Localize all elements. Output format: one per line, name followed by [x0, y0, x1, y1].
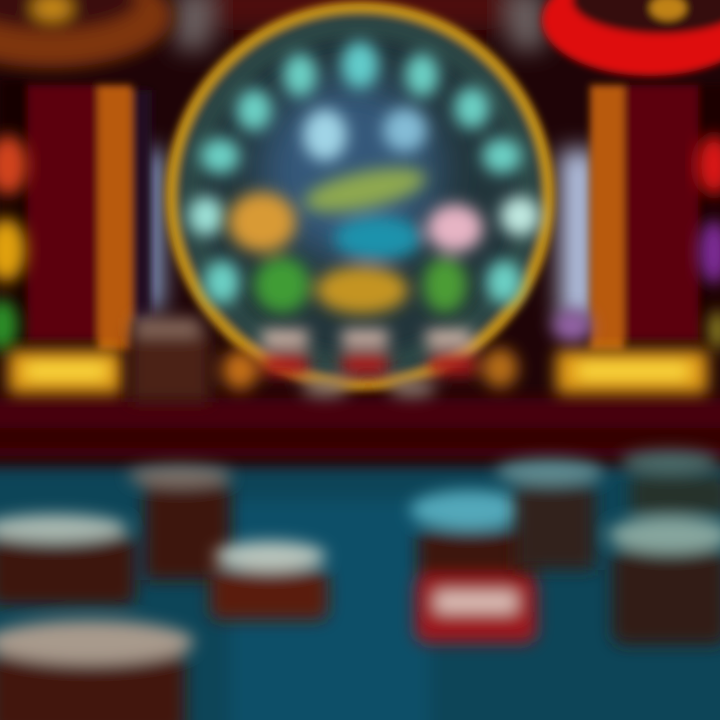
wheel base red and white buttons — [130, 310, 592, 402]
right pillar — [590, 85, 720, 350]
side lights right — [696, 135, 720, 350]
wheel rim — [172, 8, 548, 384]
red and white chip stack — [410, 490, 537, 643]
centre chip stack — [210, 541, 328, 620]
counter band — [0, 398, 720, 458]
wheel hub backdrop — [260, 80, 440, 260]
table surface — [0, 466, 720, 720]
left pillar — [0, 80, 152, 350]
fortune wheel — [172, 8, 548, 384]
wheel centre graphics — [228, 160, 483, 314]
yellow signs — [8, 350, 708, 394]
right arch — [542, 0, 720, 76]
left chip stacks — [0, 465, 232, 720]
left arch — [0, 0, 172, 68]
wheel inner ring — [190, 26, 530, 366]
side lights left — [0, 135, 28, 351]
right chip stacks — [496, 450, 720, 645]
wheel segments — [188, 41, 540, 304]
